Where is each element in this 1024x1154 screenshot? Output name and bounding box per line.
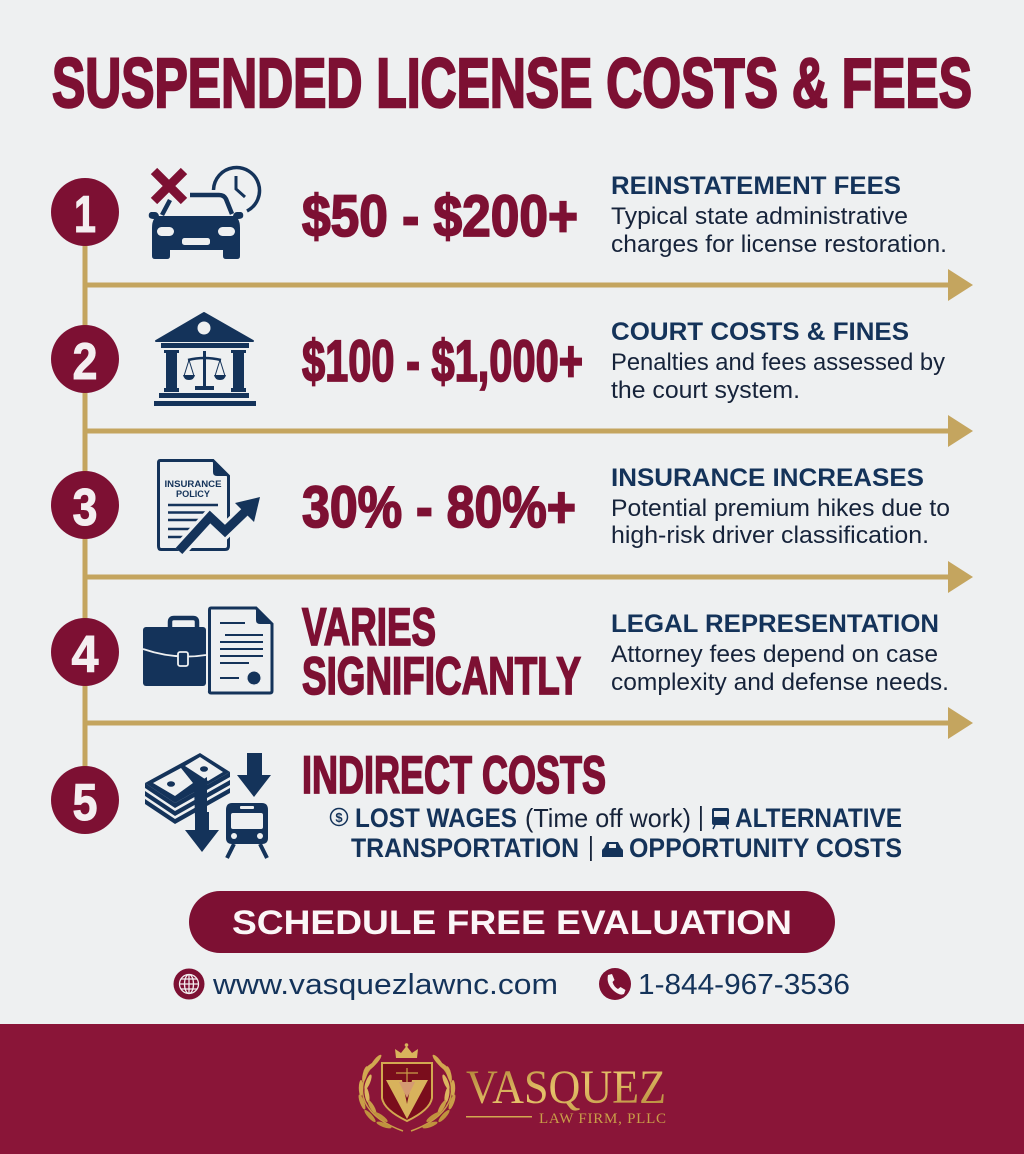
logo: wordmark: LAW FIRM, PLLC <box>539 1111 666 1127</box>
text block: reinstatement fees: Typical state administrative <box>611 203 908 230</box>
button: schedule free evaluation: SCHEDULE FREE EVALUATION <box>232 904 792 942</box>
text block: legal representation <box>611 610 949 696</box>
amount: legal: SIGNIFICANTLY <box>302 647 581 706</box>
text block: legal representation: Attorney fees depend on case <box>611 641 938 668</box>
text block: reinstatement fees: REINSTATEMENT FEES <box>611 172 901 200</box>
text block: reinstatement fees <box>611 172 947 258</box>
amount: legal: VARIES <box>302 598 436 657</box>
text block: insurance increases <box>611 464 950 549</box>
step 5 badge: 5 <box>72 774 98 832</box>
text block: legal representation: complexity and defense needs. <box>611 669 949 696</box>
amount: reinstatement: $50 - $200+ <box>302 184 578 249</box>
text block: indirect cost list: $ <box>335 810 343 825</box>
text block: indirect cost list: ALTERNATIVE <box>735 803 902 833</box>
logo: wordmark: VASQUEZ <box>466 1061 666 1114</box>
text block: indirect cost list: OPPORTUNITY COSTS <box>629 833 902 863</box>
step 4 badge: 4 <box>72 626 99 684</box>
amount: court: $100 - $1,000+ <box>302 329 583 394</box>
text block: court costs: Penalties and fees assessed by <box>611 349 945 376</box>
text block: indirect cost list: TRANSPORTATION <box>351 833 579 863</box>
text block: insurance increases: INSURANCE INCREASES <box>611 464 924 492</box>
timeline connector and arrows <box>82 212 973 802</box>
text block: court costs: the court system. <box>611 377 800 404</box>
step 3 badge <box>51 471 119 539</box>
heading: indirect costs: INDIRECT COSTS <box>302 746 606 805</box>
text block: reinstatement fees: charges for license restoration. <box>611 231 947 258</box>
icon: courthouse with scales <box>154 313 256 406</box>
icon: insurance policy with rising arrow <box>158 460 260 551</box>
icon: insurance policy with rising arrow: POLICY <box>176 489 211 500</box>
amount: insurance: 30% - 80%+ <box>302 475 576 540</box>
text block: indirect cost list: LOST WAGES <box>355 803 517 833</box>
step 5 badge <box>51 766 119 834</box>
icon: globe <box>174 968 204 1000</box>
text block: indirect cost list: (Time off work) <box>525 803 691 833</box>
phone number: 1-844-967-3536 <box>638 969 850 1001</box>
button: schedule free evaluation <box>189 891 835 953</box>
amount: legal <box>302 598 581 706</box>
step 2 badge <box>51 325 119 393</box>
text block: court costs <box>611 318 945 404</box>
text block: legal representation: LEGAL REPRESENTATION <box>611 610 939 638</box>
step 3 badge: 3 <box>72 479 98 537</box>
text block: indirect cost list <box>330 803 902 863</box>
icon: car with X and clock <box>149 168 259 259</box>
step 4 badge <box>51 618 119 686</box>
icon: phone <box>599 968 631 1000</box>
footer band <box>0 1024 1024 1154</box>
logo: crest <box>357 1043 457 1131</box>
icon: insurance policy with rising arrow: INSURANCE <box>164 479 222 490</box>
website: www.vasquezlawnc.com <box>212 969 558 1001</box>
step 1 badge: 1 <box>74 186 96 244</box>
step 1 badge <box>51 178 119 246</box>
text block: court costs: COURT COSTS & FINES <box>611 318 909 346</box>
icon: cash stack, down arrows and bus <box>145 753 271 858</box>
icon: briefcase and document <box>143 608 272 693</box>
text block: insurance increases: Potential premium hikes due to <box>611 495 950 522</box>
step 2 badge: 2 <box>72 333 98 391</box>
text block: insurance increases: high-risk driver classification. <box>611 522 929 549</box>
